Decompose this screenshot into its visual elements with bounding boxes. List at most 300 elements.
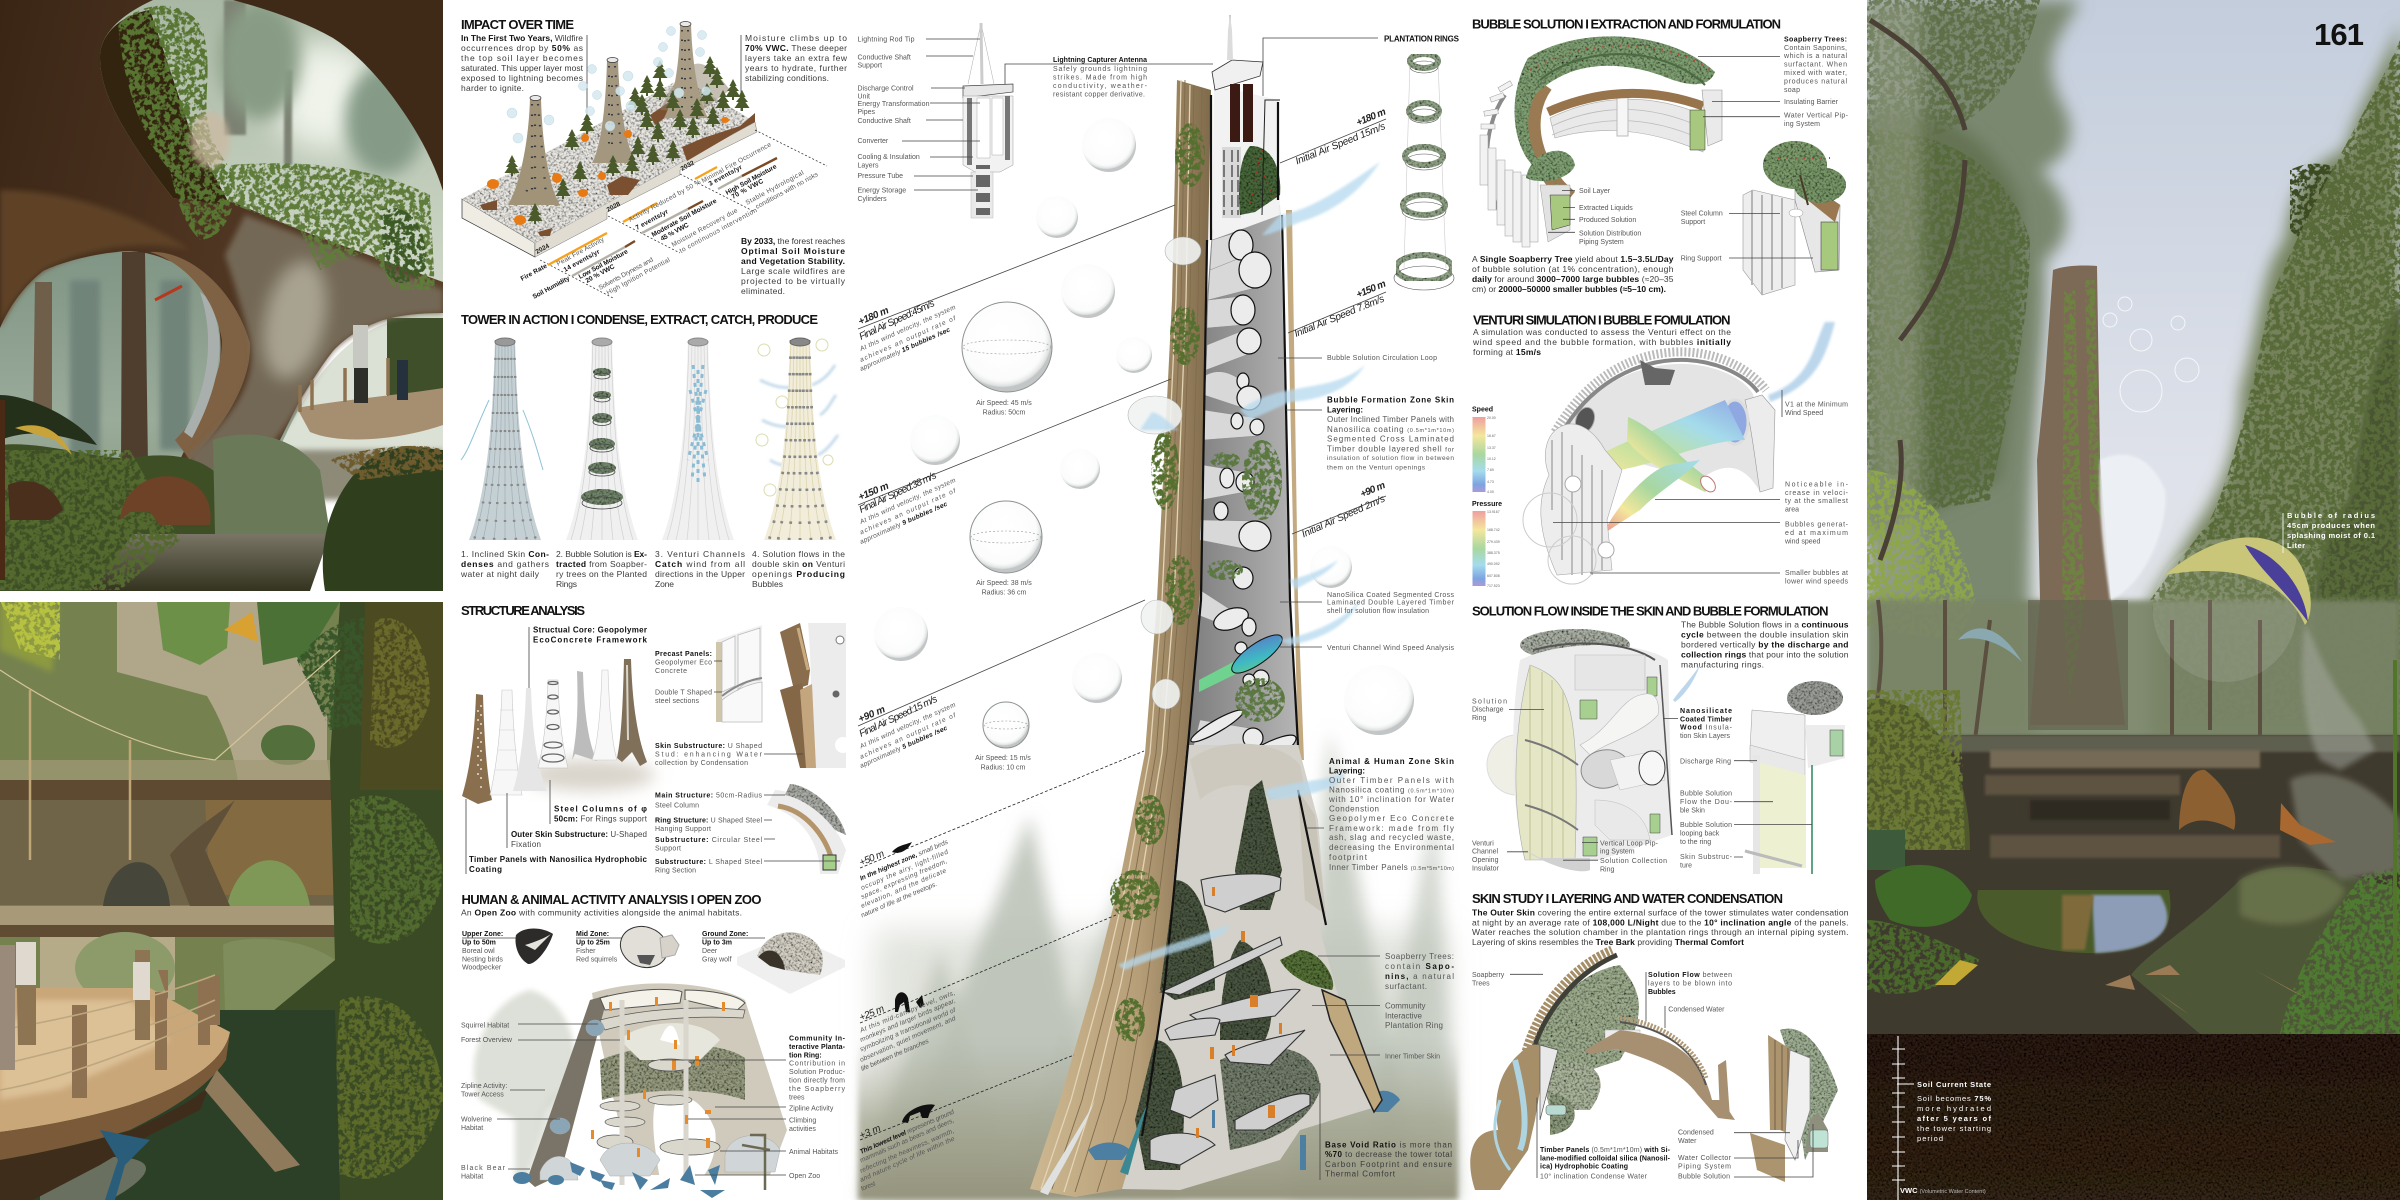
- timeline table beneath isometric block: Solvents Dryness and: [598, 256, 655, 292]
- structural labels: Steel Columns of φ: [554, 804, 647, 814]
- bubble 45 m/s: Air Speed: 45 m/s: [976, 400, 1032, 407]
- bubble 45 m/s: Radius: 50cm: [983, 410, 1026, 416]
- text: first two years: occurrences drop by 50% as: [461, 43, 583, 53]
- animal and human zone callout: Outer Timber Panels with: [1329, 776, 1454, 785]
- text: by 2033: eliminated.: [741, 286, 785, 296]
- skin labels: [1472, 972, 1732, 1181]
- antenna callouts: Cooling & Insulation: [858, 154, 920, 161]
- label group: final air speed 180: At this wind velocity, the system: [858, 304, 957, 353]
- ground zone: Up to 3m: [702, 939, 732, 946]
- venturi labels: wind speed: [1784, 538, 1821, 545]
- venturi labels: area: [1785, 507, 1799, 514]
- right zoo labels: Contribution in: [789, 1061, 845, 1068]
- bubble solution labels: Water Vertical Pip-: [1784, 112, 1849, 120]
- solution flow labels: Flow the Dou-: [1680, 799, 1733, 806]
- panel: lower-left render, open zoo walkways: [0, 600, 443, 1200]
- timeline table beneath isometric block: Activity Reduced by 50 %: [628, 179, 702, 224]
- callout: bubble radius: splashing moist of 0.1: [2287, 531, 2375, 540]
- venturi labels: crease in veloci-: [1785, 490, 1849, 497]
- zone note: +25 m monkeys: At this mid-canopy level, owls,: [858, 990, 956, 1035]
- bubble solution labels: Soapberry Trees:: [1784, 36, 1847, 43]
- structural labels: Coating: [469, 865, 502, 874]
- pressure legend: 279.439: [1487, 540, 1500, 544]
- pressure legend: [1472, 501, 1502, 588]
- text: first two years: saturated. This upper layer most: [461, 63, 584, 73]
- bubble 15 m/s: Radius: 10 cm: [981, 764, 1026, 772]
- text: moisture climbs: 70% VWC. These deeper: [745, 43, 847, 53]
- soapberry yield paragraph: of bubble solution (at 1% concentration), enough: [1472, 264, 1674, 274]
- solution flow labels: Venturi: [1472, 840, 1494, 847]
- upper zone: Nesting birds: [462, 956, 503, 963]
- solution flow labels: Coated Timber: [1680, 716, 1732, 723]
- right trees: [2150, 20, 2400, 740]
- text: first two years: In The First Two Years, Wildfire: [461, 33, 583, 43]
- zone note: +50 m birds: occupy the airy, light-filled: [860, 849, 950, 892]
- pressure legend: 490.092: [1487, 562, 1500, 566]
- intro paragraph: cycle between the double insulation skin: [1681, 630, 1849, 640]
- pressure legend: 717.523: [1487, 584, 1500, 588]
- leader: [1553, 390, 1782, 573]
- animal and human zone callout: Condenstion: [1329, 804, 1379, 814]
- skin labels: Bubble Solution: [1678, 1174, 1730, 1181]
- captions: Rings: [556, 579, 577, 589]
- bubble solution labels: Solution Distribution: [1579, 230, 1641, 237]
- text: moisture climbs: years to hydrate, further: [745, 63, 847, 73]
- interior grey void: [1188, 205, 1298, 745]
- zone note: +3 m bear: mammals such as bears and deers,: [859, 1117, 955, 1164]
- wind streams: [1118, 162, 1380, 970]
- venturi labels: ty at the smallest: [1785, 498, 1848, 505]
- detail labels: Ring Structure: U Shaped Steel: [655, 817, 762, 824]
- soapberry and ring callouts: [1385, 952, 1454, 1060]
- label group: final air speed 90: [857, 600, 1145, 770]
- solution flow labels: Ring: [1472, 715, 1487, 722]
- ground zone: Gray wolf: [702, 956, 732, 963]
- tower in distance: [2028, 265, 2128, 730]
- solution flow labels: Opening: [1472, 857, 1499, 864]
- tower 4: produce: [756, 338, 838, 540]
- timeline table beneath isometric block: Fire Rate: [520, 263, 549, 283]
- initial air speed labels: +180 m: [1355, 106, 1388, 129]
- animal and human zone callout: Inner Timber Panels (0.5m*5m*10m): [1329, 863, 1454, 872]
- solution flow labels: Wood Insula-: [1680, 725, 1733, 732]
- detail labels: Stud: enhancing Water: [655, 752, 763, 758]
- viewing platform and people: [297, 388, 443, 439]
- zone note: +25 m monkeys: symbolizing a transitional world of: [859, 1007, 958, 1053]
- skin labels: Timber Panels (0.5m*1m*10m) with Si-: [1540, 1147, 1671, 1154]
- ring section detail: [767, 784, 846, 874]
- top core: [1212, 15, 1280, 240]
- timeline table beneath isometric block: 2032: [680, 160, 696, 173]
- pressure legend: 607.808: [1487, 574, 1500, 578]
- tower callouts: NanoSilica Coated Segmented Cross: [1327, 592, 1454, 599]
- timeline table beneath isometric block: Moisture Recovery due: [671, 207, 739, 249]
- left zoo labels: Wolverine: [461, 1117, 492, 1124]
- zoo section drawing: [513, 983, 787, 1198]
- timeline table beneath isometric block: Low Soil Moisture: [578, 248, 630, 281]
- heading: plantation rings: PLANTATION RINGS: [1384, 34, 1460, 43]
- antenna callouts: Conductive Shaft: [858, 118, 911, 125]
- soil moisture gauge: the tower starting: [1917, 1124, 1991, 1133]
- bubble solution labels: soap: [1784, 87, 1800, 94]
- timeline table beneath isometric block: conditions with no risks: [755, 171, 820, 211]
- text: by 2033: By 2033, the forest reaches: [741, 236, 845, 246]
- solution flow labels: Insulator: [1472, 866, 1500, 873]
- captions: [460, 549, 845, 589]
- solution flow labels: to the ring: [1680, 839, 1711, 846]
- intro paragraph: collection rings that pour into the solution: [1681, 649, 1849, 659]
- left zoo labels: Squirrel Habitat: [461, 1022, 509, 1030]
- bubble solution labels: Steel Column: [1681, 210, 1723, 218]
- intro paragraph: wind speed and the bubble formation, with bubbles initially: [1472, 337, 1731, 347]
- structural labels: Fixation: [511, 840, 541, 849]
- antenna description: resistant copper derivative.: [1053, 91, 1145, 98]
- right zoo labels: trees: [789, 1094, 805, 1101]
- text: first two years: exposed to lightning becomes: [461, 73, 583, 83]
- speed legend: 16.67: [1487, 434, 1496, 438]
- venturi labels: ed at maximum: [1785, 530, 1848, 537]
- antenna drawing: [963, 23, 1013, 218]
- venturi labels: Noticeable in-: [1785, 481, 1849, 488]
- detail labels: collection by Condensation: [655, 760, 748, 767]
- skin labels: 10° inclination Condense Water: [1540, 1173, 1648, 1181]
- timber outer skin: [1030, 80, 1211, 1197]
- timeline table beneath isometric block: Minimal Fire Occurrence: [701, 141, 773, 185]
- right zoo labels: teractive Planta-: [789, 1044, 846, 1051]
- wind stream: [1768, 322, 1835, 402]
- animal and human zone callout: [1328, 757, 1455, 872]
- left zoo labels: Habitat: [461, 1174, 483, 1181]
- bubble 45 m/s: [962, 302, 1052, 416]
- bubble 15 m/s: Air Speed: 15 m/s: [975, 755, 1031, 762]
- label group: final air speed 90: At this wind velocity, the system: [858, 701, 957, 751]
- bubble 15 m/s: [975, 702, 1031, 772]
- soil moisture gauge: after 5 years of: [1917, 1114, 1992, 1123]
- label group: final air speed 180: approximately 15 bubbles /sec: [859, 326, 952, 373]
- label group: final air speed 150: At this wind velocity, the system: [858, 477, 957, 526]
- mid zone: Mid Zone:: [576, 931, 609, 938]
- skin labels: Condensed Water: [1668, 1006, 1725, 1013]
- soapberry and ring callouts: nins, a natural: [1385, 972, 1454, 981]
- bubble 38 m/s: [970, 501, 1042, 596]
- timber skin detail: [780, 623, 851, 768]
- captions: 1. Inclined Skin Con-: [461, 549, 549, 559]
- antenna callouts: Discharge Control: [858, 85, 914, 92]
- panel: human and animal activity: [461, 892, 846, 1198]
- antenna callouts: Support: [858, 63, 882, 70]
- pressure legend: Pressure: [1472, 501, 1502, 508]
- timeline table beneath isometric block: 45 % VWC: [660, 222, 690, 243]
- animal and human zone callout: decreasing the Environmental: [1329, 843, 1454, 852]
- timeline table beneath isometric block: 14 events/yr: [563, 248, 601, 274]
- captions: Zone: [655, 579, 674, 589]
- venturi ring drawing: [1523, 352, 1775, 584]
- left zoo labels: [461, 1022, 513, 1181]
- antenna callouts: Energy Transformation: [858, 101, 930, 108]
- speed legend: 20.00: [1487, 416, 1496, 420]
- antenna callouts: Lightning Rod Tip: [858, 36, 915, 43]
- black section cut lines: [1175, 95, 1298, 880]
- animal and human zone callout: footprint: [1329, 853, 1368, 862]
- skin labels: Soapberry: [1472, 972, 1505, 979]
- left zoo labels: Habitat: [461, 1125, 483, 1132]
- timeline table beneath isometric block: High Soil Moisture: [725, 163, 778, 197]
- timeline table beneath isometric block: 7 events/yr: [635, 208, 670, 232]
- captions: tracted from Soapber-: [556, 559, 647, 569]
- soil moisture gauge: Soil Current State: [1917, 1080, 1991, 1089]
- distant rainbow bubble: [1958, 628, 2022, 662]
- solution flow labels: Bubble Solution: [1680, 791, 1732, 798]
- detail labels: Main Structure: 50cm-Radius: [655, 792, 762, 800]
- zone note: +50 m birds: [858, 751, 1144, 919]
- pressure legend: 388.375: [1487, 551, 1500, 555]
- single panel section: [1750, 1029, 1838, 1182]
- pressure legend: 13.9167: [1487, 510, 1500, 514]
- soil moisture gauge: period: [1917, 1134, 1943, 1143]
- soapberry and ring callouts: Interactive: [1385, 1012, 1422, 1021]
- bubble solution labels: Produced Solution: [1579, 217, 1636, 224]
- intro paragraph: bordered vertically by the discharge and: [1681, 640, 1848, 650]
- soapberry yield paragraph: A Single Soapberry Tree yield about 1.5–3.5L/Day: [1472, 254, 1674, 264]
- tower callouts: Outer Inclined Timber Panels with: [1327, 415, 1454, 424]
- misty trees: [474, 990, 574, 1180]
- base void ratio callout: Base Void Ratio is more than: [1325, 1140, 1452, 1150]
- base void ratio callout: %70 to decrease the tower total: [1325, 1150, 1452, 1159]
- text: by 2033: projected to be virtually: [741, 276, 846, 286]
- captions: 2. Bubble Solution is Ex-: [556, 549, 647, 559]
- initial air speed labels: Initial Air Speed 7.8m/s: [1293, 294, 1386, 340]
- animal and human zone callout: Animal & Human Zone Skin: [1329, 757, 1454, 766]
- label group: final air speed 150: [857, 379, 1171, 546]
- mid zone: Fisher: [576, 948, 596, 955]
- soapberry and ring callouts: Community: [1385, 1002, 1425, 1011]
- precast panel detail: [716, 625, 762, 722]
- main section tower: [1030, 15, 1400, 1197]
- label group: final air speed 90: approximately 5 bubbles /sec: [859, 725, 949, 770]
- tower callouts: insulation of solution flow in between: [1327, 455, 1454, 462]
- bubble solution labels: mixed with water,: [1784, 70, 1847, 77]
- soapberry and ring callouts: Soapberry Trees:: [1385, 952, 1454, 961]
- zone note: +3 m bear: +3 m: [858, 1123, 882, 1142]
- bubble solution labels: [1579, 36, 1849, 263]
- text: moisture climbs: [745, 33, 848, 83]
- captions: double skin on Venturi: [752, 559, 845, 569]
- zone note: +50 m birds: elevation, and the delicate: [860, 867, 948, 910]
- intro paragraph: at night by an average rate of 108,000 L/Night due to the 10° inclination angle of the panels.: [1472, 917, 1848, 927]
- solution flow labels: ture: [1680, 862, 1692, 870]
- detail labels: Concrete: [655, 668, 687, 675]
- venturi wind speed analysis: [1199, 629, 1287, 692]
- tower callouts: Venturi Channel Wind Speed Analysis: [1327, 645, 1454, 652]
- intro paragraph: [1472, 907, 1849, 947]
- solution flow labels: Ring: [1600, 866, 1615, 873]
- text: moisture climbs: Moisture climbs up to: [745, 33, 847, 43]
- upper zone: Upper Zone:: [462, 931, 503, 938]
- intro paragraph: Water reaches the solution chamber in the plantation rings through an internal piping system.: [1472, 927, 1848, 937]
- plantation rings stack: [1394, 54, 1454, 290]
- skin labels: ica) Hydrophobic Coating: [1540, 1164, 1628, 1171]
- solution flow labels: Discharge: [1472, 707, 1504, 714]
- label group: final air speed 90: Final Air Speed:15 m/s: [858, 694, 939, 740]
- solution flow labels: looping back: [1680, 830, 1720, 837]
- structural labels: Outer Skin Substructure: U-Shaped: [511, 830, 647, 839]
- bubble solution labels: surfactant. When: [1784, 62, 1847, 69]
- interior planting: [1207, 440, 1285, 722]
- antenna callouts: Pressure Tube: [858, 173, 903, 180]
- skin labels: Water Collector: [1678, 1155, 1732, 1162]
- skin section drawing: [1745, 681, 1845, 874]
- middle tower: [592, 60, 636, 163]
- structural labels: 50cm: For Rings support: [554, 814, 648, 824]
- zone note: +50 m birds: nature of life at the treetops.: [860, 881, 938, 919]
- structural labels: Structual Core: Geopolymer: [533, 626, 647, 634]
- timeline table beneath isometric block: 2028: [606, 201, 622, 214]
- speed legend: [1472, 406, 1496, 494]
- antenna callouts: Pipes: [858, 109, 876, 116]
- structural labels: [469, 626, 648, 874]
- right zoo labels: Solution Produc-: [789, 1069, 846, 1076]
- bubble 38 m/s: Radius: 36 cm: [982, 589, 1027, 596]
- animal and human zone callout: ash, slag and recycled waste,: [1329, 833, 1454, 842]
- upper zone: Woodpecker: [462, 965, 502, 972]
- mid forest band: [1867, 600, 2400, 745]
- solution flow labels: ble Skin: [1680, 807, 1705, 814]
- venturi labels: V1 at the Minimum: [1785, 401, 1848, 408]
- solution flow labels: Vertical Loop Pip-: [1600, 840, 1659, 847]
- isometric forest timeline block: [462, 22, 757, 257]
- antenna callouts: Layers: [858, 163, 879, 170]
- timeline table beneath isometric block: Soil Humidity: [532, 275, 571, 301]
- tower callouts: Timber double layered shell for: [1327, 444, 1455, 454]
- solution flow labels: tion Skin Layers: [1680, 733, 1730, 740]
- skin labels: layers to be blown into: [1648, 980, 1732, 987]
- soil layer: [1867, 1034, 2400, 1200]
- panel: impact over time: [461, 17, 848, 301]
- trunks and mid trees: [1870, 600, 2260, 740]
- venturi labels: Bubbles generat-: [1785, 522, 1849, 529]
- text: moisture climbs: layers take an extra few: [745, 53, 848, 63]
- tower callouts: [1327, 355, 1455, 652]
- right zoo labels: Community In-: [789, 1036, 846, 1042]
- antenna callouts: [858, 36, 930, 203]
- structural labels: Timber Panels with Nanosilica Hydrophobic: [469, 855, 648, 864]
- zone note: +25 m monkeys: [858, 915, 1116, 1073]
- label group: final air speed 150: approximately 9 bubbles /sec: [859, 501, 949, 546]
- timeline table beneath isometric block: to continuous intervention: [679, 207, 759, 255]
- text: by 2033: [741, 236, 846, 296]
- label group: final air speed 90: +90 m: [857, 704, 887, 725]
- bubble solution labels: Soil Layer: [1579, 188, 1611, 195]
- right zoo labels: Zipline Activity: [789, 1106, 834, 1112]
- antenna description: conductivity, weather-: [1053, 83, 1148, 90]
- bubble solution labels: Support: [1681, 219, 1705, 226]
- detail labels: Support: [655, 845, 681, 852]
- antenna callouts: Unit: [858, 94, 870, 101]
- detail labels: Substructure: Circular Steel: [655, 837, 762, 844]
- intro paragraph: Layering of skins resembles the Tree Bark providing Thermal Comfort: [1472, 937, 1744, 947]
- initial air speed labels: Initial Air Speed 2m/s: [1300, 494, 1387, 540]
- skin labels: Piping System: [1678, 1163, 1731, 1170]
- captions: Bubbles: [752, 579, 783, 589]
- label group: final air speed 180: +180 m: [857, 305, 891, 328]
- timeline table beneath isometric block: 3 events/yr: [708, 164, 744, 188]
- cylinder drawing: [1487, 629, 1700, 871]
- antenna callouts: Conductive Shaft: [858, 54, 911, 61]
- zone note: +25 m monkeys: observation, quiet movement, and: [859, 1015, 957, 1064]
- panel: lightning capturer antenna: [858, 23, 1213, 218]
- captions: water at night daily: [460, 569, 540, 579]
- timeline table beneath isometric block: High Ignition Potential: [606, 256, 672, 297]
- base void ratio callout: Carbon Footprint and ensure: [1325, 1160, 1453, 1169]
- soil moisture gauge: VWC (Volumetric Water Content): [1900, 1186, 1986, 1195]
- solution flow labels: ing System: [1600, 849, 1635, 856]
- bubble solution labels: produces natural: [1784, 78, 1847, 85]
- zone note: +3 m bear: [858, 1055, 1074, 1193]
- left zoo labels: Black Bear: [461, 1165, 506, 1172]
- right zoo labels: the Soapberry: [789, 1086, 846, 1093]
- heading: SKIN STUDY I LAYERING AND WATER CONDENSATION: [1472, 891, 1783, 906]
- solution flow labels: Discharge Ring: [1680, 758, 1731, 765]
- venturi labels: Smaller bubbles at: [1785, 570, 1848, 577]
- planting ring drawing: [1480, 36, 1722, 247]
- label group: final air speed 180: Final Air Speed:45m/s: [858, 298, 937, 343]
- soapberry yield paragraph: [1472, 254, 1674, 294]
- skin labels: Solution Flow between: [1648, 972, 1732, 979]
- text: first two years: harder to ignite.: [461, 83, 524, 93]
- heading: SOLUTION FLOW INSIDE THE SKIN AND BUBBLE FORMULATION: [1472, 603, 1828, 618]
- speed legend: Speed: [1472, 406, 1493, 414]
- panel: skin study: [1470, 891, 1849, 1190]
- base void ratio callout: Thermal Comfort: [1325, 1170, 1396, 1179]
- detail labels: Substructure: L Shaped Steel: [655, 859, 762, 866]
- animal and human zone callout: Nanosilica coating (0.5m*1m*10m): [1329, 786, 1454, 794]
- zone note: +25 m monkeys: life between the branches: [860, 1038, 931, 1073]
- tower callouts: shell for solution flow insulation: [1327, 608, 1429, 615]
- pressure legend: 168.742: [1487, 528, 1500, 532]
- label group: final air speed 150: +150 m: [857, 481, 891, 503]
- solution flow labels: Solution Collection: [1600, 858, 1667, 865]
- solution flow labels: [1472, 698, 1733, 873]
- tower callouts: Bubble Formation Zone Skin: [1327, 396, 1454, 404]
- skin labels: Water: [1678, 1138, 1697, 1145]
- timeline table beneath isometric block: 20 % VWC: [585, 263, 616, 285]
- venturi labels: lower wind speeds: [1785, 579, 1848, 586]
- soil moisture gauge: more hydrated: [1917, 1104, 1991, 1113]
- tower 1: condense: [461, 338, 543, 540]
- soapberry and ring callouts: contain Sapo-: [1385, 962, 1454, 971]
- attached half bubbles: [1128, 237, 1201, 709]
- antenna description: Safely grounds lightning: [1053, 66, 1147, 73]
- speed legend: 7.69: [1487, 468, 1494, 472]
- timeline table beneath isometric block: Peak Fire Activity: [556, 236, 606, 268]
- soapberry yield paragraph: cm) or 20000–50000 smaller bubbles (≈5–10 cm).: [1472, 284, 1666, 294]
- callout: bubble radius: Bubble of radius: [2287, 511, 2375, 520]
- mid zone: Up to 25m: [576, 939, 610, 946]
- skin labels: lane-modified colloidal silica (Nanosil-: [1540, 1155, 1671, 1162]
- zone note: +3 m bear: reflecting the heaviness, warmth,: [859, 1128, 955, 1175]
- venturi labels: [1784, 401, 1849, 586]
- text: by 2033: Large scale wildfires are: [741, 266, 845, 276]
- speed legend: 4.73: [1487, 480, 1494, 484]
- right zoo labels: tion directly from: [789, 1078, 845, 1085]
- callout: bubble radius: [2283, 511, 2375, 553]
- ground, reflecting water and grass: [1867, 660, 2400, 1035]
- antenna callouts: Converter: [858, 138, 889, 145]
- zone note: +25 m monkeys: monkeys and larger birds appear,: [859, 997, 957, 1044]
- detail labels: Skin Substructure: U Shaped: [655, 743, 762, 750]
- leader lines: [466, 627, 550, 874]
- left zoo labels: Zipline Activity:: [461, 1083, 507, 1090]
